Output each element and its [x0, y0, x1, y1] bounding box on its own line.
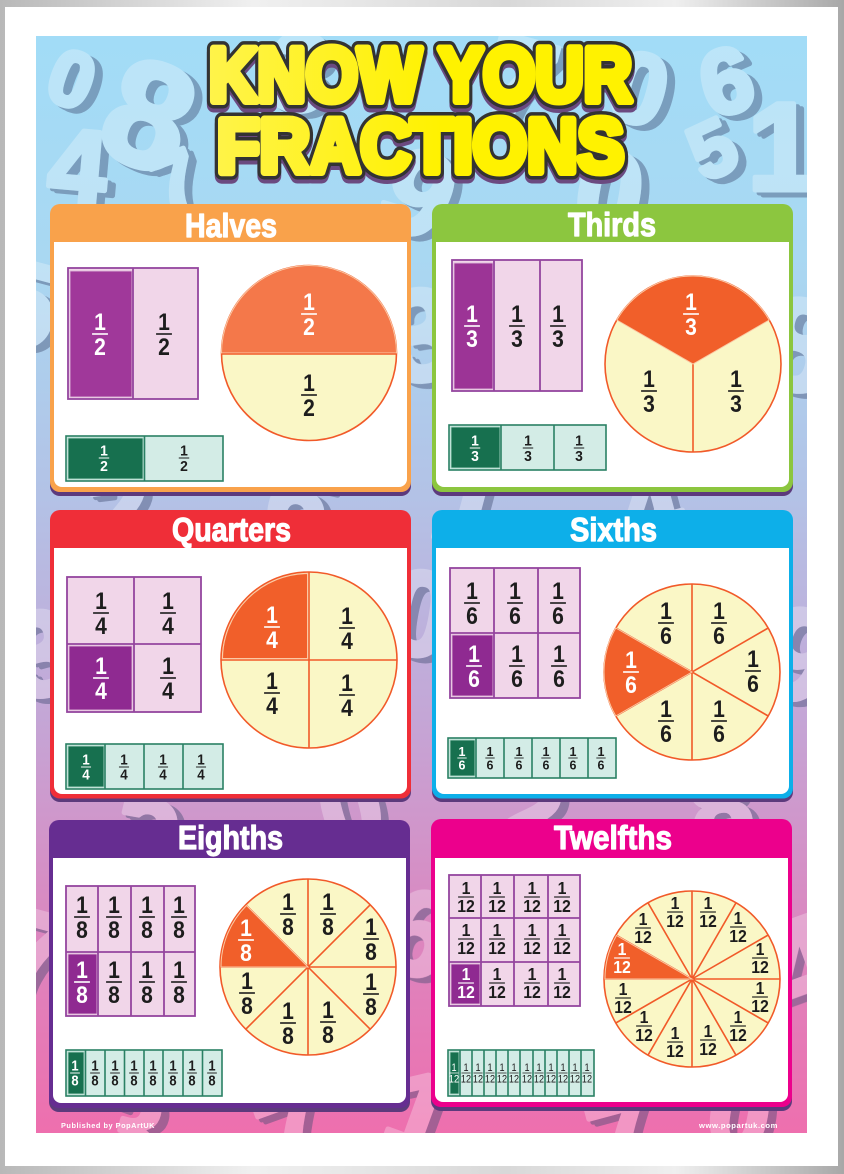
pie: twelfths: 12	[729, 1025, 747, 1045]
poster background with scattered numbers: 0	[305, 740, 396, 875]
strip: sixths: 1	[598, 743, 604, 759]
pie: eighths: 1	[365, 969, 377, 995]
pie: eighths: 1	[322, 889, 334, 915]
strip: halves: 2	[180, 459, 188, 475]
pie: eighths: 8	[322, 914, 334, 940]
poster background with scattered numbers: 3	[259, 7, 340, 138]
pie: thirds: 1	[643, 366, 655, 392]
poster background with scattered numbers: 6	[689, 26, 764, 138]
pie: eighths: 8	[322, 1022, 334, 1048]
pie: twelfths: 12	[751, 957, 769, 977]
strip: twelfths: 12	[558, 1074, 568, 1086]
strip: twelfths: 12	[509, 1074, 519, 1086]
pie: twelfths: 1	[671, 1023, 679, 1043]
bar model: eighths: 8	[141, 917, 153, 943]
bar model: halves	[68, 268, 198, 399]
strip: sixths: 1	[570, 743, 576, 759]
title: FRACTIONS	[217, 108, 624, 193]
title: FRACTIONS	[217, 104, 624, 189]
pie: sixths: 1	[660, 696, 672, 722]
pie: sixths: 6	[660, 623, 672, 649]
strip: twelfths: 12	[485, 1074, 495, 1086]
bar model: twelfths: 12	[553, 896, 571, 916]
bar model: twelfths: 12	[457, 938, 475, 958]
panel: halves	[50, 204, 411, 496]
bar model: sixths: 1	[552, 578, 564, 604]
strip: quarters: 4	[82, 766, 90, 783]
pie: twelfths: 1	[756, 978, 764, 998]
title: FRACTIONS	[217, 104, 624, 189]
poster background with scattered numbers: 1	[419, 431, 519, 577]
bar model: twelfths: 1	[493, 964, 501, 984]
strip: eighths: 8	[169, 1073, 177, 1089]
strip: sixths: 6	[516, 757, 522, 773]
pie: sixths: 1	[660, 598, 672, 624]
bar model: thirds: 3	[511, 326, 523, 352]
strip: eighths: 1	[169, 1058, 177, 1074]
bar model: twelfths: 12	[488, 982, 506, 1002]
bar model: twelfths: 1	[528, 878, 536, 898]
pie: sixths: 6	[713, 623, 725, 649]
poster background with scattered numbers: 7	[139, 131, 211, 230]
poster background with scattered numbers: 8	[81, 22, 217, 208]
strip: eighths: 8	[188, 1073, 196, 1089]
pie: thirds	[605, 276, 781, 452]
strip: thirds	[449, 425, 606, 470]
panel: sixths	[432, 510, 793, 802]
bar model: sixths: 6	[509, 603, 521, 629]
bar model: quarters: 4	[162, 678, 174, 704]
bar model: quarters	[67, 577, 201, 712]
bar model: eighths: 1	[76, 957, 88, 983]
pie: sixths: 1	[625, 647, 637, 673]
poster background with scattered numbers: 0	[598, 28, 680, 150]
strip: twelfths: 12	[534, 1074, 544, 1086]
pie: halves	[222, 266, 396, 440]
poster background with scattered numbers: 2	[80, 442, 161, 573]
bar model: eighths: 1	[141, 957, 153, 983]
pie: twelfths	[604, 891, 780, 1067]
pie: thirds: 3	[685, 314, 697, 340]
strip: twelfths: 12	[461, 1074, 471, 1086]
bar model: twelfths: 1	[462, 964, 470, 984]
bar model: halves: 1	[94, 309, 106, 335]
bar model: quarters: 1	[162, 653, 174, 679]
strip: eighths: 1	[149, 1058, 157, 1074]
pie: halves: 1	[303, 370, 315, 396]
panel: thirds	[432, 204, 793, 496]
heading: thirds: Thirds	[568, 206, 656, 243]
bar model: sixths: 6	[468, 666, 480, 692]
strip: eighths: 1	[130, 1058, 138, 1074]
bar model: twelfths: 1	[558, 920, 566, 940]
pie: halves: 1	[303, 289, 315, 315]
pie: twelfths: 1	[619, 979, 627, 999]
bar model: sixths: 6	[552, 603, 564, 629]
pie: eighths: 1	[365, 914, 377, 940]
pie: thirds: 1	[730, 366, 742, 392]
strip: thirds: 3	[471, 449, 479, 465]
bar model: halves: 2	[94, 334, 106, 360]
bar model: twelfths: 1	[558, 878, 566, 898]
bar model: twelfths: 12	[488, 938, 506, 958]
bar model: thirds: 1	[511, 301, 523, 327]
heading: quarters: Quarters	[172, 511, 291, 548]
pie: twelfths: 12	[635, 1025, 653, 1045]
pie: quarters: 1	[266, 668, 278, 694]
panel: quarters	[50, 510, 411, 802]
poster background with scattered numbers: 6	[249, 434, 349, 571]
poster background with scattered numbers: 8	[680, 742, 761, 873]
strip: halves: 1	[180, 443, 188, 460]
bar model: eighths: 1	[141, 892, 153, 918]
strip: eighths: 8	[91, 1073, 99, 1089]
pie: quarters: 4	[341, 695, 353, 721]
bar model: eighths: 8	[108, 982, 120, 1008]
strip: twelfths: 1	[584, 1062, 590, 1074]
poster background with scattered numbers: 4	[605, 440, 696, 575]
pie: eighths	[220, 879, 396, 1055]
bar model: eighths: 1	[108, 892, 120, 918]
poster background with scattered numbers: 2	[484, 745, 575, 880]
pie: quarters: 1	[266, 602, 278, 628]
poster background with scattered numbers: 0	[36, 30, 107, 128]
bar model: sixths: 1	[553, 641, 565, 667]
bar model: quarters: 4	[95, 678, 107, 704]
bar model: twelfths: 12	[553, 938, 571, 958]
bar model: eighths: 1	[173, 892, 185, 918]
bar model: eighths: 8	[76, 917, 88, 943]
strip: quarters: 1	[82, 751, 90, 768]
pie: twelfths: 12	[699, 1039, 717, 1059]
pie: eighths: 8	[365, 994, 377, 1020]
bar model: quarters: 1	[95, 653, 107, 679]
strip: twelfths: 1	[560, 1062, 566, 1074]
strip: twelfths: 1	[499, 1062, 505, 1074]
strip: sixths: 1	[516, 743, 522, 759]
bar model: sixths: 1	[468, 641, 480, 667]
heading: halves: Halves	[185, 207, 277, 244]
pie: twelfths: 1	[756, 939, 764, 959]
poster background with scattered numbers: 0	[375, 542, 464, 686]
strip: eighths: 8	[130, 1073, 138, 1089]
strip: quarters: 4	[197, 766, 205, 783]
pie: twelfths: 1	[640, 1007, 648, 1027]
pie: quarters: 4	[266, 627, 278, 653]
poster background with scattered numbers: 7	[468, 6, 571, 159]
bar model: halves: 1	[158, 309, 170, 335]
poster background with scattered numbers: 1	[747, 78, 817, 217]
pie: twelfths: 12	[729, 926, 747, 946]
strip: twelfths: 1	[463, 1062, 469, 1074]
pie: eighths: 1	[240, 915, 252, 941]
strip: twelfths: 12	[473, 1074, 483, 1086]
pie: sixths: 1	[713, 598, 725, 624]
bar model: eighths: 8	[76, 982, 88, 1008]
strip: twelfths: 12	[582, 1074, 592, 1086]
pie: sixths: 1	[747, 646, 759, 672]
strip: twelfths: 1	[487, 1062, 493, 1074]
bar model: twelfths: 1	[462, 878, 470, 898]
strip: twelfths: 1	[524, 1062, 530, 1074]
strip: quarters: 1	[159, 751, 167, 768]
pie: eighths: 8	[241, 993, 253, 1019]
strip: thirds: 1	[471, 433, 479, 450]
bar model: eighths: 1	[108, 957, 120, 983]
strip: sixths	[448, 738, 616, 778]
strip: eighths: 1	[188, 1058, 196, 1074]
pie: twelfths: 12	[751, 996, 769, 1016]
strip: sixths: 6	[459, 757, 465, 773]
strip: sixths: 6	[543, 757, 549, 773]
pie: twelfths: 1	[639, 909, 647, 929]
pie: thirds: 1	[685, 289, 697, 315]
bar model: twelfths: 1	[558, 964, 566, 984]
strip: quarters: 4	[120, 766, 128, 783]
strip: eighths: 8	[208, 1073, 216, 1089]
bar model: quarters: 1	[95, 588, 107, 614]
strip: eighths: 8	[111, 1073, 119, 1089]
strip: halves: 2	[100, 459, 108, 475]
strip: quarters: 1	[120, 751, 128, 768]
bar model: sixths: 6	[553, 666, 565, 692]
strip: sixths: 6	[598, 757, 604, 773]
bar model: sixths: 1	[509, 578, 521, 604]
bar model: twelfths: 12	[553, 982, 571, 1002]
strip: sixths: 6	[487, 757, 493, 773]
strip: thirds: 3	[524, 449, 532, 465]
bar model: sixths: 1	[511, 641, 523, 667]
bar model: sixths: 6	[511, 666, 523, 692]
pie: thirds: 3	[730, 391, 742, 417]
bar model: thirds: 1	[466, 301, 478, 327]
bar model: thirds: 3	[552, 326, 564, 352]
bar model: halves: 2	[158, 334, 170, 360]
strip: thirds: 1	[575, 433, 583, 450]
bar model: twelfths: 12	[523, 982, 541, 1002]
strip: twelfths	[448, 1050, 594, 1096]
pie: thirds: 3	[643, 391, 655, 417]
strip: eighths: 8	[71, 1073, 79, 1089]
bar model: quarters: 4	[95, 613, 107, 639]
bar model: sixths: 1	[466, 578, 478, 604]
strip: twelfths: 1	[572, 1062, 578, 1074]
bar model: sixths	[450, 568, 580, 698]
pie: sixths: 6	[660, 721, 672, 747]
pie: twelfths: 1	[734, 908, 742, 928]
pie: twelfths: 12	[634, 927, 652, 947]
strip: twelfths: 1	[536, 1062, 542, 1074]
bar model: eighths: 8	[108, 917, 120, 943]
strip: quarters: 1	[197, 751, 205, 768]
strip: twelfths: 12	[497, 1074, 507, 1086]
strip: sixths: 6	[570, 757, 576, 773]
strip: eighths: 8	[149, 1073, 157, 1089]
strip: twelfths: 12	[570, 1074, 580, 1086]
pie: eighths: 1	[241, 968, 253, 994]
website address: www.popartuk.com	[698, 1121, 778, 1130]
pie: twelfths: 1	[704, 893, 712, 913]
panel: twelfths	[431, 819, 792, 1111]
strip: eighths: 1	[208, 1058, 216, 1074]
bar model: quarters: 4	[162, 613, 174, 639]
poster background with scattered numbers: 6	[364, 859, 473, 1008]
pie: twelfths: 1	[618, 939, 626, 959]
pie: twelfths: 12	[666, 911, 684, 931]
strip: twelfths: 12	[449, 1074, 459, 1086]
pie: twelfths: 12	[699, 911, 717, 931]
pie: halves: 2	[303, 395, 315, 421]
bar model: eighths	[66, 886, 195, 1016]
pie: eighths: 1	[282, 998, 294, 1024]
pie: twelfths: 12	[613, 957, 631, 977]
strip: quarters: 4	[159, 766, 167, 783]
strip: quarters	[66, 744, 223, 789]
pie: quarters	[221, 572, 397, 748]
bar model: twelfths: 12	[523, 938, 541, 958]
bar model: thirds	[452, 260, 582, 391]
strip: sixths: 1	[543, 743, 549, 759]
bar model: twelfths: 1	[462, 920, 470, 940]
poster background with scattered numbers: 5	[109, 747, 190, 878]
bar model: eighths: 1	[76, 892, 88, 918]
pie: twelfths: 12	[614, 997, 632, 1017]
title: KNOW YOUR	[209, 37, 632, 122]
pie: sixths: 6	[713, 721, 725, 747]
pie: eighths: 8	[282, 1023, 294, 1049]
strip: thirds: 1	[524, 433, 532, 450]
pie: eighths: 1	[282, 889, 294, 915]
pie: sixths: 6	[747, 671, 759, 697]
strip: eighths	[66, 1050, 222, 1096]
bar model: thirds: 3	[466, 326, 478, 352]
heading: twelfths: Twelfths	[554, 819, 672, 856]
pie: sixths: 1	[713, 696, 725, 722]
title: KNOW YOUR	[209, 33, 632, 118]
title	[209, 33, 632, 193]
pie: eighths: 8	[365, 939, 377, 965]
strip: twelfths: 1	[451, 1062, 457, 1074]
poster background with scattered numbers: 5	[674, 100, 751, 198]
pie: quarters: 1	[341, 603, 353, 629]
pie: twelfths: 1	[671, 893, 679, 913]
strip: twelfths: 12	[546, 1074, 556, 1086]
pie: eighths: 8	[282, 914, 294, 940]
bar model: eighths: 8	[173, 917, 185, 943]
strip: eighths: 1	[91, 1058, 99, 1074]
pie: halves: 2	[303, 314, 315, 340]
bar model: eighths: 8	[173, 982, 185, 1008]
title: KNOW YOUR	[209, 33, 632, 118]
strip: halves	[66, 436, 223, 481]
poster background with scattered numbers: 4	[44, 107, 112, 228]
bar model: twelfths: 12	[488, 896, 506, 916]
pie: eighths: 1	[322, 997, 334, 1023]
strip: twelfths: 1	[511, 1062, 517, 1074]
bar model: twelfths: 1	[493, 878, 501, 898]
pie: sixths: 6	[625, 672, 637, 698]
bar model: twelfths: 1	[528, 920, 536, 940]
pie: twelfths: 1	[734, 1007, 742, 1027]
bar model: twelfths: 12	[523, 896, 541, 916]
bar model: twelfths	[449, 875, 580, 1006]
strip: eighths: 1	[71, 1058, 79, 1074]
strip: twelfths: 1	[475, 1062, 481, 1074]
pie: twelfths: 12	[666, 1041, 684, 1061]
pie: sixths	[604, 584, 780, 760]
pie: quarters: 4	[266, 693, 278, 719]
publisher credit: Published by PopArtUK	[61, 1121, 155, 1130]
poster background with scattered numbers: 0	[565, 122, 654, 266]
strip: thirds: 3	[575, 449, 583, 465]
poster background with scattered numbers: 3	[373, 257, 469, 413]
heading: sixths: Sixths	[570, 511, 657, 548]
panel: eighths	[49, 819, 410, 1112]
bar model: eighths: 8	[141, 982, 153, 1008]
strip: twelfths: 12	[522, 1074, 532, 1086]
heading: eighths: Eighths	[178, 819, 283, 856]
pie: quarters: 1	[341, 670, 353, 696]
bar model: twelfths: 12	[457, 982, 475, 1002]
poster background with scattered numbers: 9	[360, 119, 477, 268]
strip: eighths: 1	[111, 1058, 119, 1074]
strip: twelfths: 1	[548, 1062, 554, 1074]
pie: quarters: 4	[341, 628, 353, 654]
bar model: sixths: 6	[466, 603, 478, 629]
bar model: twelfths: 12	[457, 896, 475, 916]
strip: halves: 1	[100, 443, 108, 460]
bar model: eighths: 1	[173, 957, 185, 983]
bar model: quarters: 1	[162, 588, 174, 614]
pie: twelfths: 1	[704, 1021, 712, 1041]
bar model: thirds: 1	[552, 301, 564, 327]
strip: sixths: 1	[459, 743, 465, 759]
strip: sixths: 1	[487, 743, 493, 759]
pie: eighths: 8	[240, 940, 252, 966]
bar model: twelfths: 1	[528, 964, 536, 984]
bar model: twelfths: 1	[493, 920, 501, 940]
